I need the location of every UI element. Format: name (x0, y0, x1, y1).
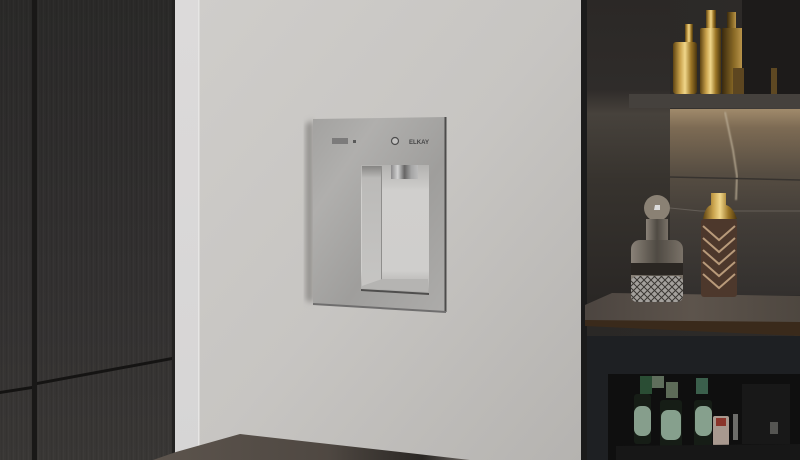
dispenser (306, 117, 446, 313)
brand logo: ELKAY (409, 139, 430, 146)
white wall reveal (175, 0, 199, 460)
upper dark panel (742, 0, 800, 94)
sensor button (392, 138, 398, 144)
table top (153, 434, 470, 460)
shelf (629, 94, 800, 109)
display window (332, 138, 348, 144)
wine rack (616, 444, 800, 460)
crystal decanter (631, 195, 683, 302)
beer bottles (634, 376, 790, 450)
spout (391, 165, 418, 179)
wine fridge opening (608, 374, 800, 460)
gold cocktail shaker (701, 193, 737, 297)
counter (585, 293, 800, 336)
indicator (353, 140, 356, 143)
right shelving unit (581, 0, 800, 460)
lower cabinet (587, 336, 800, 460)
left column with under-shelf glow (587, 0, 670, 300)
drip tray (362, 279, 428, 292)
left cabinet (0, 0, 175, 460)
wall (199, 0, 581, 460)
niche left side (362, 166, 381, 286)
gold bottles (673, 10, 777, 94)
marble backsplash (670, 109, 800, 295)
basin niche (361, 165, 429, 294)
wall shadow (306, 120, 313, 303)
stainless plate (313, 117, 446, 312)
